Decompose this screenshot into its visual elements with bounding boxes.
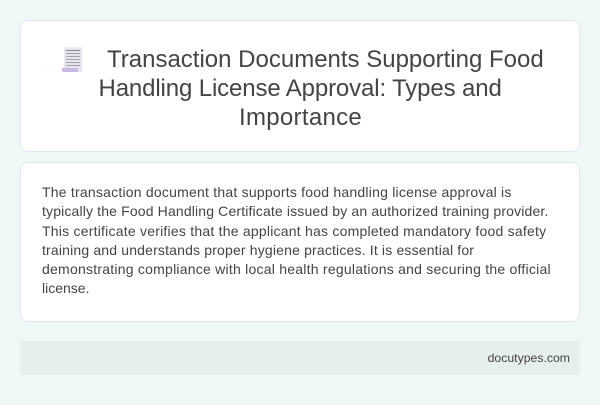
heading: Importance (239, 104, 362, 131)
panel: description card (20, 162, 580, 322)
text block: description: This certificate verifies that the applicant has completed mandatory food safety (42, 223, 546, 239)
footer text: docutypes.com (488, 351, 570, 365)
panel: title card (20, 20, 580, 152)
text block: description: The transaction document that supports food handling license approval is (42, 184, 512, 200)
text block: description (42, 184, 551, 296)
heading: Handling License Approval: Types and (98, 75, 502, 102)
text block: description: typically the Food Handling Certificate issued by an authorized training provider. (42, 203, 548, 219)
footer bar (20, 341, 580, 375)
text block: description: training and understands proper hygiene practices. It is essential for (42, 242, 474, 258)
heading: Transaction Documents Supporting Food (107, 46, 544, 73)
icon: document receipt (62, 47, 82, 72)
heading (98, 46, 544, 131)
text block: description: demonstrating compliance with local health regulations and securing the official (42, 261, 551, 277)
text block: description: license. (42, 280, 89, 296)
